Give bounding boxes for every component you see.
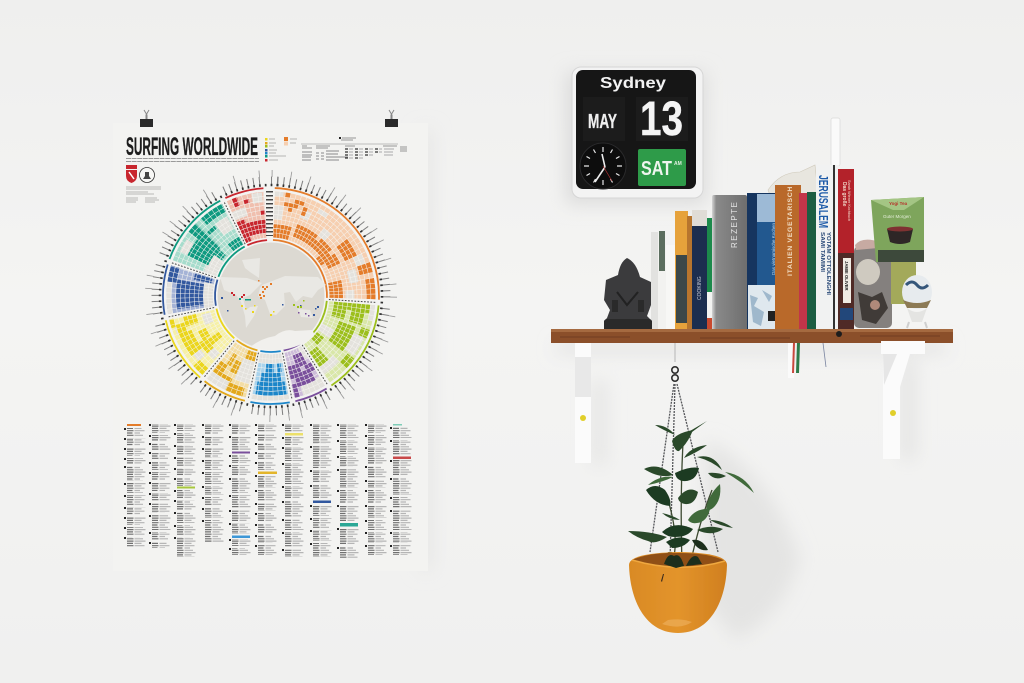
grey Rezepte binder [712,195,747,331]
circular badge logo [140,168,154,182]
candle [831,118,840,166]
green and white book [707,218,715,331]
column 4 [202,424,227,542]
hanging plant [628,343,754,633]
sector: green [131,156,411,436]
green tea box: Guter Morgen [883,214,911,219]
Jerusalem cookbook: JERUSALEM [816,175,831,228]
day card: AM [674,161,682,167]
navy cookbook: COOKING [697,276,703,300]
red Sarah Wiener book: JAMIE OLIVER [844,261,849,291]
flip clock: Sydney [572,67,703,198]
decorated porcelain egg [902,275,932,328]
continents [220,258,326,328]
sector: orange [138,163,404,429]
red Sarah Wiener book: Sarah Wiener Kochbuch [847,180,851,221]
clock case [572,67,703,198]
day card [638,149,686,186]
column 6 [255,424,280,555]
column 3 [174,424,199,557]
sector: teal [130,155,412,437]
orange ceramic pot [629,552,727,633]
red Sarah Wiener book: Das große [841,182,847,207]
binder clip left [140,110,153,127]
stems [668,443,712,565]
small white book [651,232,658,331]
yellow screw cap [580,415,586,421]
books on the shelf [651,165,854,331]
Jerusalem cookbook [816,165,839,331]
sector: amber [139,164,403,428]
blue cookbook [747,193,781,331]
thin brown book [687,216,692,331]
binder clip right [385,110,398,127]
key table [301,137,407,160]
leaves [628,421,754,567]
brown Italien Vegetarisch book: ITALIEN VEGETARISCH [788,186,794,276]
brown Italien Vegetarisch book [775,185,801,331]
column 1 [124,428,149,547]
sector: red [127,152,415,440]
region highlight bars [127,424,411,538]
orange and dark book [675,211,688,331]
black ganesha statue [604,258,652,331]
cell grid [171,196,371,396]
label ticks [130,155,412,437]
white book with green spine label [658,231,666,331]
flip card seams [583,97,688,141]
navy cookbook [692,210,707,331]
dark green book [807,192,816,330]
thin white book [666,245,675,331]
surf spot markers [221,280,319,316]
sector: blue [146,171,396,421]
city name: Sydney [600,75,666,92]
right shelf bracket [881,341,925,459]
blue cookbook: Das vietnamische Kochen [771,222,776,275]
hook and chain link [672,343,678,381]
wheel chart of surf spots [119,144,423,448]
green tea box [871,197,924,262]
poster sheet [113,123,428,571]
glass jar with shells [854,240,892,328]
poster: Surfing Worldwide: SURFING WORLDWIDE [126,133,258,161]
column 2 [149,424,174,548]
month card: MAY [588,111,617,133]
column 7 [282,424,307,557]
month labels column [266,191,273,236]
clock face [576,70,696,189]
colour legend [265,137,297,162]
red shield logo [126,165,137,183]
sector: yellow [119,144,423,448]
Jerusalem cookbook: YOTAM OTTOLENGHI [825,232,831,296]
grey Rezepte binder: REZEPTE [730,201,739,248]
dashed sector dividers [167,201,377,400]
column 10 [365,424,390,555]
column 9 [337,424,362,558]
surf spot index table [124,424,415,558]
red Sarah Wiener book [838,169,854,330]
Antarctica [250,330,314,350]
column 8 [310,424,335,557]
green tea box: Yogi Tea [889,201,908,206]
column 5 [229,424,254,555]
crocheted white cloth behind books [768,165,818,195]
sector: navy [146,171,396,421]
credits text [126,187,161,202]
Jerusalem cookbook: SAMI TAMIMI [819,232,825,273]
wooden shelf [551,329,953,343]
chains [650,384,718,560]
column 11 [390,427,415,555]
soft wall shadows [420,72,946,640]
yellow screw cap [890,410,896,416]
world map disc [218,242,326,350]
date card: 13 [640,93,683,146]
pink-red book [799,193,808,331]
poster: Surfing Worldwide [113,110,428,571]
analog clock [580,143,626,189]
left shelf bracket [575,343,591,463]
bookmark ribbons [788,343,826,378]
small tea box behind [891,262,916,304]
sector: purple [123,148,419,444]
day card: SAT [641,158,672,180]
intro text lines [126,158,259,162]
